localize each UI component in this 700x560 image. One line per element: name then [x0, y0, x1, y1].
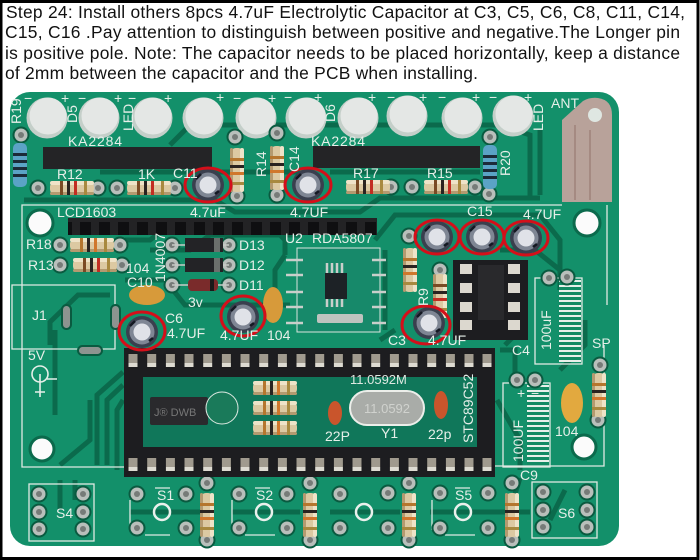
silkscreen labels: +	[368, 89, 376, 105]
silkscreen labels: S2	[256, 487, 273, 503]
round footprint inside socket	[206, 392, 238, 424]
heading: step instructions: of 2mm between the capacitor and the PCB when installing.	[5, 63, 478, 83]
silkscreen labels: −	[78, 90, 86, 106]
silkscreen labels: −	[233, 90, 241, 106]
socket footprint labels: Y1	[381, 425, 398, 441]
silkscreen labels: S6	[558, 505, 575, 521]
silkscreen labels: −	[438, 89, 446, 105]
silkscreen labels	[8, 89, 611, 521]
silkscreen labels: +	[216, 89, 224, 105]
silkscreen labels: S5	[455, 487, 472, 503]
heading: step instructions	[5, 2, 685, 83]
silkscreen labels: KA2284	[68, 133, 122, 149]
silkscreen labels: D12	[239, 257, 265, 273]
silkscreen labels: R19	[8, 98, 24, 124]
silkscreen labels: C4	[512, 342, 530, 358]
silkscreen labels: +	[164, 90, 172, 106]
silkscreen labels: D13	[239, 237, 265, 253]
silkscreen labels: +	[524, 89, 532, 105]
silkscreen labels: C15	[467, 203, 493, 219]
U2 RDA5807 module	[286, 248, 386, 332]
yellow ceramic capacitors	[129, 285, 583, 423]
LCD1603 header	[68, 218, 377, 235]
silkscreen labels: +	[61, 90, 69, 106]
silkscreen labels: +	[419, 89, 427, 105]
silkscreen labels: R15	[427, 165, 453, 181]
silkscreen labels: LCD1603	[57, 204, 116, 220]
mounting holes	[27, 210, 600, 461]
socket footprint labels: 22P	[325, 428, 350, 444]
highlight: red capacitor circles	[119, 168, 548, 350]
crystal Y1	[350, 391, 424, 425]
silkscreen labels: D5	[64, 105, 80, 123]
socket footprint labels: J® DWB	[154, 407, 196, 419]
silkscreen labels: U2	[285, 230, 303, 246]
silkscreen labels: LED	[120, 104, 136, 131]
MCU socket STC89C52	[124, 348, 495, 477]
silkscreen labels: 1K	[138, 166, 156, 182]
silkscreen labels: C3	[388, 332, 406, 348]
silkscreen labels: D11	[239, 277, 264, 293]
silkscreen labels: +	[472, 89, 480, 105]
silkscreen labels: C9	[520, 467, 538, 483]
circuit tracks	[24, 125, 585, 520]
board outline	[10, 92, 619, 546]
inner resistors	[253, 381, 297, 435]
panel: green PCB photo	[8, 89, 619, 548]
silkscreen labels: D6	[322, 104, 338, 122]
socket footprint labels	[154, 372, 476, 444]
ANT antenna pad	[562, 98, 612, 202]
crystal Y1: 11.0592	[364, 401, 410, 416]
silkscreen labels: R12	[57, 166, 83, 182]
pads	[12, 124, 608, 548]
silkscreen labels: C6	[165, 310, 183, 326]
socket footprint labels: 22p	[428, 426, 452, 442]
silkscreen labels: −	[531, 385, 539, 401]
socket footprint labels: STC89C52	[460, 374, 476, 443]
silkscreen labels: S4	[56, 505, 73, 521]
socket footprint labels: 11.0592M	[350, 372, 407, 387]
KA2284 left chip bar	[43, 147, 212, 169]
silkscreen labels: 4.7UF	[167, 325, 205, 341]
diodes D13 D12 D11	[172, 238, 229, 291]
silkscreen labels: 4.7UF	[523, 206, 561, 222]
silkscreen labels: C14	[286, 146, 302, 172]
silkscreen labels: R17	[353, 165, 379, 181]
silkscreen labels: +	[268, 90, 276, 106]
silkscreen labels: 4.7UF	[428, 332, 466, 348]
silkscreen labels: R18	[26, 236, 52, 252]
heading: step instructions: is positive pole. Note: The capacitor needs to be placed horizontally, keep a distance	[5, 43, 680, 63]
KA2284 right chip bar	[313, 146, 480, 168]
silkscreen labels: −	[284, 89, 292, 105]
silkscreen labels: R20	[497, 150, 513, 176]
resistors	[13, 143, 606, 537]
silkscreen labels: +	[114, 90, 122, 106]
silkscreen labels: R13	[28, 257, 54, 273]
silkscreen labels: C11	[173, 165, 198, 181]
switch rings	[154, 504, 471, 520]
heading: step instructions: Step 24: Install others 8pcs 4.7uF Electrolytic Capacitor at C3, C5, C6, C8, C11, C14,	[6, 2, 685, 22]
silkscreen labels: C10	[127, 274, 153, 290]
silkscreen labels: 3v	[188, 294, 203, 310]
silkscreen labels: −	[128, 90, 136, 106]
silkscreen labels: 5V	[28, 347, 46, 363]
silkscreen labels: 4.7UF	[220, 327, 258, 343]
black component inside socket	[150, 397, 208, 425]
silkscreen labels: KA2284	[311, 133, 365, 149]
silkscreen labels: 104	[126, 260, 150, 276]
silkscreen labels: ANT	[551, 95, 579, 111]
silkscreen labels: 104	[555, 423, 579, 439]
5V jack symbol	[32, 366, 57, 397]
silkscreen labels: −	[24, 90, 32, 106]
silkscreen labels: −	[489, 89, 497, 105]
capacitor hatch footprints	[527, 280, 581, 465]
silkscreen labels: R14	[253, 151, 269, 177]
heading: step instructions: C15, C16 .Pay attention to distinguish between positive and negative.The Longer pin	[5, 22, 680, 42]
LED row	[26, 96, 534, 138]
silkscreen labels: SP	[592, 335, 611, 351]
silkscreen labels: 100UF	[510, 420, 526, 462]
8-pin IC socket	[453, 260, 528, 340]
silkscreen outlines	[12, 205, 607, 541]
silkscreen labels: 4.7uF	[190, 204, 226, 220]
silkscreen labels: −	[387, 89, 395, 105]
silkscreen labels: S1	[157, 487, 174, 503]
silkscreen labels: R9	[415, 288, 431, 306]
silkscreen labels: +	[517, 385, 525, 401]
silkscreen labels: 100uF	[538, 310, 554, 350]
red ceramic capacitors	[328, 391, 448, 425]
silkscreen labels: 4.7UF	[290, 204, 328, 220]
electrolytic capacitors	[126, 169, 542, 348]
silkscreen labels: J1	[32, 307, 47, 323]
silkscreen labels: 1N4007	[152, 233, 168, 282]
silkscreen labels: LED	[530, 104, 546, 131]
silkscreen labels: +	[314, 89, 322, 105]
power jack slots	[62, 305, 120, 355]
silkscreen labels: RDA5807	[312, 230, 373, 246]
silkscreen labels: 104	[267, 327, 291, 343]
